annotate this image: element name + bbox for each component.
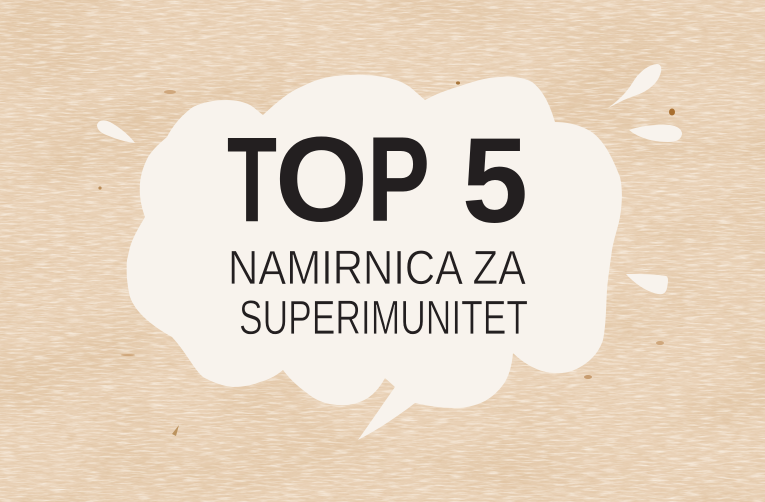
subtitle: NAMIRNICA ZA: [228, 242, 526, 295]
splash drop: lower right: [626, 274, 668, 294]
subtitle: [228, 242, 528, 345]
splash drop: right: [629, 125, 682, 142]
subtitle: SUPERIMUNITET: [239, 292, 528, 345]
title: TOP 5: T: [227, 111, 277, 247]
speech bubble cloud: [127, 75, 622, 440]
title: TOP 5: O: [275, 111, 368, 247]
title: TOP 5: P: [367, 111, 430, 247]
title: TOP 5: 5: [462, 112, 528, 248]
splash drop: top right: [608, 64, 661, 108]
title: TOP 5: [227, 111, 528, 248]
splash drop: left: [97, 120, 135, 143]
